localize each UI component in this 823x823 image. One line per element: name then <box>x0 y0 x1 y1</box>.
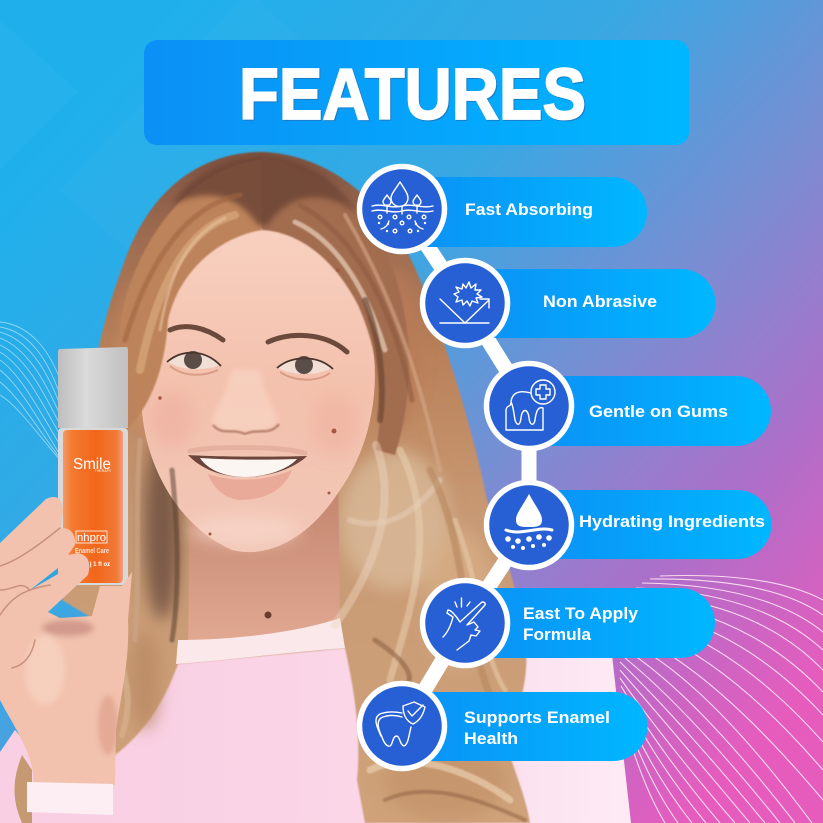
icon: water absorbing <box>372 182 433 233</box>
label: Hydrating Ingredients <box>579 512 765 531</box>
title banner <box>144 40 689 145</box>
volume: | 1 fl oz <box>90 562 110 568</box>
icon: tooth shield <box>376 702 425 746</box>
left eyebrow <box>170 327 223 340</box>
face <box>141 228 375 552</box>
label: Formula <box>523 625 592 644</box>
label: Non Abrasive <box>543 292 657 311</box>
cheek blush <box>150 392 359 544</box>
label: East To Apply <box>523 604 639 623</box>
palm shading <box>25 620 118 755</box>
front hair left lock <box>116 160 262 430</box>
hair mass <box>62 152 530 823</box>
label: Supports Enamel <box>464 708 610 727</box>
icon: finger snap <box>443 598 485 650</box>
badge <box>360 684 444 768</box>
icon: gum with plus <box>506 380 555 430</box>
pill <box>465 269 716 338</box>
background decoration: diamonds <box>0 0 340 270</box>
badge <box>486 364 572 448</box>
orange body <box>63 430 123 583</box>
product name: Enamel Care <box>75 546 109 555</box>
nhpro badge: nhpro <box>77 532 106 544</box>
badge <box>486 482 572 568</box>
hair tail left <box>14 755 32 823</box>
finger creases <box>0 528 60 668</box>
icon: hydrating drop <box>505 494 552 550</box>
front hair right lock <box>262 158 409 455</box>
hair strands <box>120 195 525 820</box>
mouth <box>188 447 307 500</box>
nose <box>212 370 279 434</box>
feature: Easy To Apply Formula <box>422 580 715 666</box>
label: Gentle on Gums <box>589 402 728 421</box>
brand sub: THERAPY <box>95 469 112 473</box>
pill <box>402 692 648 761</box>
beauty marks <box>158 268 340 618</box>
badge <box>360 166 444 252</box>
sleeve cuff <box>27 782 113 815</box>
woman <box>0 152 631 823</box>
background decoration: bottom right arcs <box>620 576 823 823</box>
left eye <box>167 351 221 375</box>
background decoration: left wave lines <box>0 322 62 460</box>
feature: Fast Absorbing <box>360 166 647 252</box>
badge <box>422 580 508 666</box>
pill <box>529 490 771 559</box>
gap between fingers <box>30 568 58 590</box>
neck <box>188 470 340 650</box>
product bottle <box>58 347 128 585</box>
pill <box>402 177 647 247</box>
connector line <box>403 209 529 726</box>
title text: FEATURES <box>239 55 586 135</box>
brand name: Smile <box>73 456 111 473</box>
pill <box>465 588 715 658</box>
hand silhouette <box>0 497 132 785</box>
collar <box>176 618 345 664</box>
hair tone patches <box>125 270 505 820</box>
shirt <box>0 625 631 823</box>
hand <box>0 497 132 785</box>
feature: Non Abrasive <box>422 260 716 346</box>
badge <box>422 260 508 346</box>
hair crown shadow <box>172 155 358 225</box>
feature: Supports Enamel Health <box>360 684 648 768</box>
label: Fast Absorbing <box>465 200 593 219</box>
right eyebrow <box>268 335 347 352</box>
label: Health <box>464 729 518 748</box>
feature: Gentle on Gums <box>486 364 771 448</box>
pill <box>529 376 771 446</box>
bottle shell <box>58 428 128 585</box>
icon: abrasion reflect <box>440 282 489 323</box>
right eye <box>277 356 333 380</box>
feature: Hydrating Ingredients <box>486 482 771 568</box>
bottle cap <box>58 347 128 428</box>
